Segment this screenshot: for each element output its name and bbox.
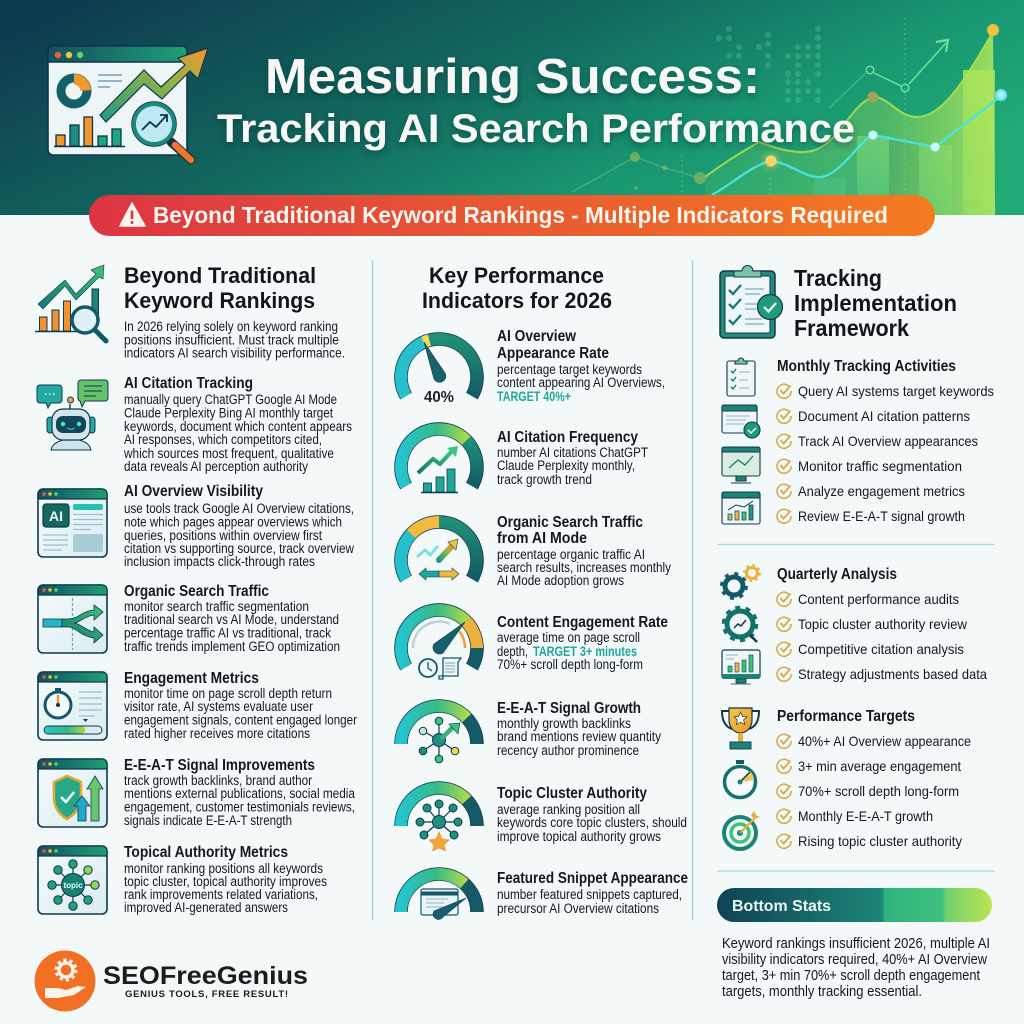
text: engagement metrics: engagement signals, content engaged longer — [124, 712, 357, 728]
icon: clipboard with badge — [720, 266, 782, 338]
heading: beyond traditional: Beyond Traditional — [124, 263, 316, 288]
heading: tracking implementation framework: Framework — [794, 315, 909, 341]
gauge: AI overview 40%: 40% — [424, 389, 454, 406]
text: content engagement rate: average time on page scroll — [497, 630, 640, 645]
heading: beyond traditional: Keyword Rankings — [124, 288, 315, 313]
text: AI overview appearance rate: TARGET 40%+ — [497, 389, 571, 404]
bottom stats pill: Bottom Stats — [732, 898, 831, 915]
text: AI citation tracking: AI responses, which competitors cited, — [124, 432, 322, 447]
text: organic search traffic from AI mode: AI Mode adoption grows — [497, 573, 624, 588]
icon: AI window: AI — [49, 508, 63, 524]
list: performance targets: Performance Targets — [777, 708, 915, 725]
text: content engagement rate — [497, 614, 668, 672]
text: topical authority metrics: monitor ranking positions all keywords — [124, 861, 323, 876]
text: featured snippet appearance — [497, 870, 688, 916]
text: AI citation frequency: Claude Perplexity monthly, — [497, 458, 635, 473]
text: engagement metrics — [124, 670, 357, 741]
text: AI overview visibility: AI Overview Visibility — [124, 483, 263, 500]
icon: AI window — [38, 489, 107, 557]
text: topic cluster authority: improve topical authority grows — [497, 829, 661, 844]
text: bottom stats summary: targets, monthly tracking essential. — [722, 983, 922, 1000]
gauge: topic cluster authority — [401, 788, 477, 851]
icon: topic cluster window: topic — [63, 881, 83, 890]
text: AI citation frequency — [497, 429, 648, 487]
text: AI overview visibility: citation vs supporting source, track overview — [124, 541, 354, 556]
alert banner: Beyond Traditional Keyword Rankings - Multiple Indicators Required — [153, 202, 888, 228]
text: engagement metrics: monitor time on page scroll depth return — [124, 686, 332, 701]
text: bottom stats summary: visibility indicators required, 40%+ AI Overview — [722, 951, 987, 968]
text: AI citation tracking: manually query ChatGPT Google AI Mode — [124, 392, 337, 407]
text: AI citation frequency: AI Citation Frequency — [497, 429, 638, 446]
gauge: content engagement rate — [401, 610, 477, 679]
icon: engagement window — [38, 672, 107, 740]
list: monthly tracking activities: Review E-E-A-T signal growth — [798, 508, 965, 524]
list: quarterly analysis: Topic cluster authority review — [798, 616, 968, 632]
text: AI citation tracking: which sources most frequent, qualitative — [123, 446, 334, 461]
list: monthly tracking activities: Analyze engagement metrics — [798, 483, 965, 499]
text: topic cluster authority: keywords core topic clusters, should — [497, 815, 687, 830]
list: monthly tracking activities: Monitor traffic segmentation — [798, 458, 962, 474]
text: AI overview appearance rate: percentage target keywords — [497, 362, 642, 377]
header dot matrix — [716, 26, 821, 103]
text: AI overview visibility: inclusion impacts click-through rates — [124, 554, 315, 569]
heading: tracking implementation framework — [794, 265, 957, 341]
bottom stats pill — [717, 888, 992, 922]
text: topical authority metrics: improved AI-generated answers — [124, 900, 288, 915]
logo: SEOFreeGenius: GENIUS TOOLS, FREE RESULT! — [125, 989, 288, 1000]
gauge: AI citation frequency — [401, 429, 477, 492]
panel: middle column KPIs — [401, 263, 688, 919]
text: organic search traffic — [124, 583, 340, 654]
text: AI citation tracking: AI Citation Tracking — [124, 375, 253, 392]
column dividers — [372, 260, 692, 920]
text: AI citation frequency: track growth trend — [497, 472, 592, 487]
text: featured snippet appearance: number featured snippets captured, — [497, 887, 682, 902]
list: performance targets: Rising topic cluster authority — [798, 833, 962, 849]
text: E-E-A-T signal growth: monthly growth backlinks — [497, 716, 631, 731]
text: organic search traffic from AI mode: from AI Mode — [497, 530, 587, 547]
text: engagement metrics: Engagement Metrics — [124, 670, 259, 687]
title — [217, 50, 855, 151]
panel: left column — [35, 263, 357, 915]
text: topic cluster authority: average ranking position all — [497, 802, 640, 817]
text: E-E-A-T signal growth — [497, 700, 661, 758]
text: AI overview appearance rate: Appearance Rate — [497, 345, 609, 362]
list: monthly tracking activities — [777, 358, 994, 524]
text: organic search traffic: percentage traffic AI vs traditional, track — [124, 626, 331, 640]
list: performance targets — [777, 708, 971, 849]
gauge: organic traffic from AI mode — [401, 522, 477, 580]
heading: tracking implementation framework: Tracking — [794, 265, 882, 291]
heading: key performance indicators: Indicators for 2026 — [422, 288, 612, 313]
text: E-E-A-T signal improvements: E-E-A-T Signal Improvements — [124, 757, 315, 774]
title: Tracking AI Search Performance — [217, 107, 855, 151]
text: content engagement rate: 70%+ scroll depth long-form — [497, 657, 643, 672]
text: bottom stats summary: Keyword rankings insufficient 2026, multiple AI — [722, 935, 990, 952]
panel: right column — [717, 265, 995, 1000]
text: E-E-A-T signal growth: brand mentions review quantity — [497, 729, 661, 744]
text: AI citation tracking: Claude Perplexity Bing AI monthly target — [124, 406, 333, 420]
text: AI citation frequency: number AI citations ChatGPT — [497, 445, 648, 460]
text: featured snippet appearance: precursor AI Overview citations — [497, 901, 659, 916]
icon: warning triangle — [120, 203, 145, 226]
heading: beyond traditional — [124, 263, 316, 313]
icon: traffic split window — [38, 585, 107, 653]
text: AI overview visibility — [124, 483, 354, 569]
text: AI citation tracking: data reveals AI perception authority — [124, 459, 308, 474]
text: organic search traffic from AI mode: Organic Search Traffic — [497, 514, 643, 531]
text: E-E-A-T signal improvements — [124, 757, 355, 828]
list: performance targets: 70%+ scroll depth long-form — [798, 783, 959, 799]
header band — [0, 0, 1024, 215]
text: E-E-A-T signal improvements: engagement, customer testimonials reviews, — [124, 800, 355, 814]
text: organic search traffic from AI mode: search results, increases monthly — [497, 560, 671, 575]
header area chart — [705, 32, 995, 215]
alert banner — [89, 195, 935, 236]
icons: monthly tracking — [722, 358, 760, 524]
icons: quarterly analysis — [722, 565, 760, 684]
text: AI overview visibility: note which pages appear overviews which — [124, 514, 342, 530]
text: AI overview visibility: use tools track Google AI Overview citations, — [124, 501, 354, 516]
text: organic search traffic: monitor search traffic segmentation — [124, 599, 309, 614]
header cyan line — [712, 96, 1001, 195]
logo: SEOFreeGenius — [34, 950, 308, 1012]
text: organic search traffic from AI mode — [497, 514, 671, 588]
text: organic search traffic from AI mode: percentage organic traffic AI — [497, 547, 645, 562]
list: monthly tracking activities: Track AI Overview appearances — [798, 433, 978, 449]
text: topic cluster authority: Topic Cluster Authority — [497, 785, 647, 802]
text: E-E-A-T signal improvements: signals indicate E-E-A-T strength — [124, 813, 292, 828]
list: performance targets: 40%+ AI Overview appearance — [798, 733, 971, 749]
text: organic search traffic: traditional search vs AI Mode, understand — [124, 612, 339, 627]
icon: robot with chat bubbles — [37, 380, 108, 450]
header bars — [814, 70, 995, 215]
text: intro: indicators AI search visibility performance. — [124, 346, 345, 360]
icon: topic cluster window — [38, 846, 107, 914]
text: E-E-A-T signal growth: E-E-A-T Signal Growth — [497, 700, 641, 717]
text: topic cluster authority — [497, 785, 687, 844]
text: bottom stats summary — [722, 935, 990, 1000]
heading: key performance indicators — [422, 263, 612, 313]
text: AI overview appearance rate — [497, 328, 665, 404]
list: quarterly analysis: Strategy adjustments based data — [798, 666, 987, 682]
text: content engagement rate: Content Engagement Rate — [497, 614, 668, 631]
text: E-E-A-T signal improvements: mentions external publications, social media — [124, 786, 355, 801]
gauge: featured snippet appearance — [401, 874, 477, 919]
list: quarterly analysis — [777, 566, 987, 682]
gauge: AI overview 40% — [401, 339, 477, 406]
list: monthly tracking activities: Query AI systems target keywords — [798, 383, 994, 399]
title: Measuring Success: — [265, 50, 760, 104]
text: AI citation tracking — [123, 375, 352, 474]
text: AI citation tracking: keywords, document which content appears — [124, 419, 352, 434]
icon: chart and magnifier — [35, 265, 106, 341]
text: AI overview visibility: queries, positions within overview first — [124, 528, 322, 543]
text: featured snippet appearance: Featured Snippet Appearance — [497, 870, 688, 887]
text: intro: In 2026 relying solely on keyword ranking — [124, 319, 338, 334]
list: performance targets: 3+ min average engagement — [798, 758, 961, 774]
header icon: analytics window — [48, 46, 208, 160]
list: monthly tracking activities: Document AI citation patterns — [798, 408, 970, 424]
text: content engagement rate: TARGET 3+ minutes — [533, 644, 637, 659]
list: performance targets: Monthly E-E-A-T growth — [798, 808, 933, 824]
text: E-E-A-T signal improvements: track growth backlinks, brand author — [124, 773, 312, 788]
text: intro: positions insufficient. Must track multiple — [124, 332, 339, 348]
list: monthly tracking activities: Monthly Tracking Activities — [777, 358, 956, 375]
text: intro — [124, 319, 345, 360]
text: content engagement rate: depth, — [497, 644, 528, 659]
text: engagement metrics: visitor rate, AI systems evaluate user — [124, 699, 313, 714]
list: quarterly analysis: Content performance audits — [798, 591, 959, 607]
text: AI overview appearance rate: AI Overview — [497, 328, 577, 345]
text: bottom stats summary: target, 3+ min 70%+ scroll depth engagement — [722, 967, 981, 984]
gauge: E-E-A-T signal growth — [401, 706, 477, 763]
list: quarterly analysis: Competitive citation analysis — [798, 641, 964, 657]
text: AI overview appearance rate: content appearing AI Overviews, — [497, 375, 665, 390]
text: E-E-A-T signal growth: recency author prominence — [497, 743, 639, 758]
text: topical authority metrics — [124, 844, 327, 915]
text: topical authority metrics: topic cluster, topical authority improves — [124, 874, 327, 889]
text: organic search traffic: Organic Search Traffic — [124, 583, 269, 600]
icons: performance targets — [722, 708, 760, 849]
list: quarterly analysis: Quarterly Analysis — [777, 566, 897, 583]
text: topical authority metrics: rank improvements related variations, — [124, 887, 318, 902]
header faint line — [572, 157, 700, 192]
logo: SEOFreeGenius: SEOFreeGenius — [103, 962, 308, 990]
text: engagement metrics: rated higher receives more citations — [124, 726, 310, 741]
header arrow line — [682, 18, 948, 195]
text: topical authority metrics: Topical Authority Metrics — [124, 844, 288, 861]
text: organic search traffic: traffic trends implement GEO optimization — [124, 639, 340, 654]
heading: key performance indicators: Key Performance — [429, 263, 604, 288]
icon: E-E-A-T shield window — [38, 759, 107, 827]
heading: tracking implementation framework: Implementation — [794, 290, 957, 316]
